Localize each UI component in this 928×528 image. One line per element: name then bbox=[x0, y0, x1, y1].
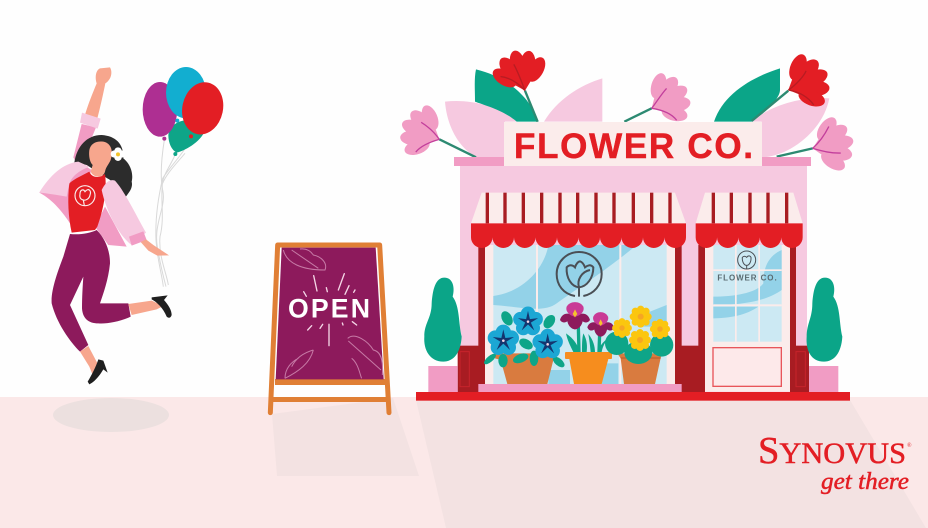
wordmark: SYNOVUS bbox=[758, 430, 906, 472]
logo: Synovus get there bbox=[758, 430, 912, 495]
door panel bbox=[713, 348, 781, 386]
flower in hair bbox=[111, 147, 125, 161]
door awning valance bbox=[696, 223, 803, 248]
primrose leaves bbox=[605, 332, 673, 364]
storefront upper: flowers and leaves bbox=[390, 43, 859, 179]
window glass bbox=[493, 245, 667, 385]
left shoe bbox=[88, 359, 108, 384]
primrose flowers bbox=[612, 306, 670, 351]
window frame bbox=[485, 245, 675, 385]
jacket right side and sleeve bbox=[102, 180, 146, 245]
petunias bbox=[488, 306, 563, 358]
window mullions bbox=[536, 245, 621, 385]
main awning valance bbox=[471, 223, 686, 248]
left pot bbox=[495, 353, 553, 384]
balloon: teal bbox=[166, 67, 206, 123]
balloon: red bbox=[177, 78, 228, 138]
iris leaves and stems bbox=[566, 327, 610, 352]
door glass bbox=[713, 245, 782, 342]
main awning canopy bbox=[471, 193, 686, 223]
open text: OPEN bbox=[288, 293, 370, 323]
door reflections bbox=[713, 250, 782, 318]
hair bbox=[74, 135, 132, 198]
base platform bbox=[416, 392, 850, 401]
flower: pink center bbox=[637, 62, 702, 134]
leaf: green right bbox=[714, 68, 780, 122]
base block details bbox=[460, 352, 805, 387]
registered mark: ® bbox=[907, 442, 912, 449]
sparkle lines bbox=[304, 274, 357, 346]
sign shadow on floor bbox=[272, 398, 419, 476]
jacket back bbox=[39, 162, 127, 247]
sleeve cuff bbox=[80, 113, 101, 129]
sign frame crossbars bbox=[272, 379, 386, 402]
face and neck bbox=[89, 141, 112, 177]
raised sleeve bbox=[73, 124, 96, 163]
window reflections bbox=[493, 245, 667, 384]
flower: red right bbox=[775, 44, 840, 119]
floor bbox=[0, 397, 928, 528]
A-frame open sign bbox=[270, 245, 389, 413]
door text: FLOWER CO. bbox=[717, 273, 777, 282]
illustration: jumping woman with balloons bbox=[39, 67, 228, 384]
iris flowers bbox=[560, 302, 614, 337]
window logo bbox=[557, 252, 602, 297]
right bush bbox=[807, 278, 842, 362]
center pot bbox=[565, 352, 612, 384]
door window grid bbox=[713, 245, 782, 342]
flower: pink right bbox=[807, 110, 859, 179]
flower: pink left bbox=[390, 95, 452, 167]
left bush bbox=[424, 278, 462, 362]
right hand bbox=[141, 239, 169, 256]
petunia leaves bbox=[482, 309, 566, 369]
cornice bbox=[454, 157, 811, 166]
leaf: light pink right bbox=[752, 98, 829, 157]
columns bbox=[478, 245, 796, 347]
window ledge bbox=[478, 384, 682, 392]
door bbox=[705, 245, 790, 392]
shirt logo bbox=[75, 186, 95, 206]
building facade bbox=[460, 165, 807, 393]
sign frame bbox=[270, 245, 389, 413]
door logo bbox=[738, 251, 756, 269]
leaf: green left bbox=[475, 69, 538, 122]
shop name: FLOWER CO. bbox=[514, 127, 753, 166]
dark base blocks bbox=[458, 346, 809, 392]
stems bbox=[439, 91, 813, 157]
sign board bbox=[276, 248, 384, 379]
pants bbox=[52, 230, 131, 352]
shop sign bbox=[504, 122, 762, 166]
main awning stripes bbox=[486, 193, 672, 223]
lower leg right bbox=[128, 301, 163, 315]
lower leg left bbox=[80, 346, 98, 375]
left planter bbox=[428, 366, 458, 392]
leaf: light pink left bbox=[445, 101, 517, 157]
right pot bbox=[617, 353, 662, 384]
right cuff bbox=[129, 231, 147, 246]
storefront lower bbox=[416, 193, 850, 401]
tagline: get there bbox=[821, 469, 909, 495]
shirt bbox=[68, 172, 106, 233]
right shoe bbox=[152, 295, 172, 318]
leaf: light pink center bbox=[544, 78, 602, 122]
right planter bbox=[809, 366, 838, 392]
door awning canopy bbox=[696, 193, 803, 223]
shop shadow on floor bbox=[416, 400, 926, 528]
balloon: green bbox=[168, 120, 205, 156]
balloon: purple bbox=[143, 82, 177, 141]
balloon strings bbox=[156, 137, 191, 287]
jacket front left bbox=[39, 162, 89, 197]
door awning stripes bbox=[712, 193, 788, 223]
raised forearm bbox=[85, 67, 111, 118]
woman shadow on floor bbox=[53, 398, 169, 432]
flower: red top left bbox=[485, 43, 555, 99]
leaf decorations bbox=[283, 249, 383, 378]
